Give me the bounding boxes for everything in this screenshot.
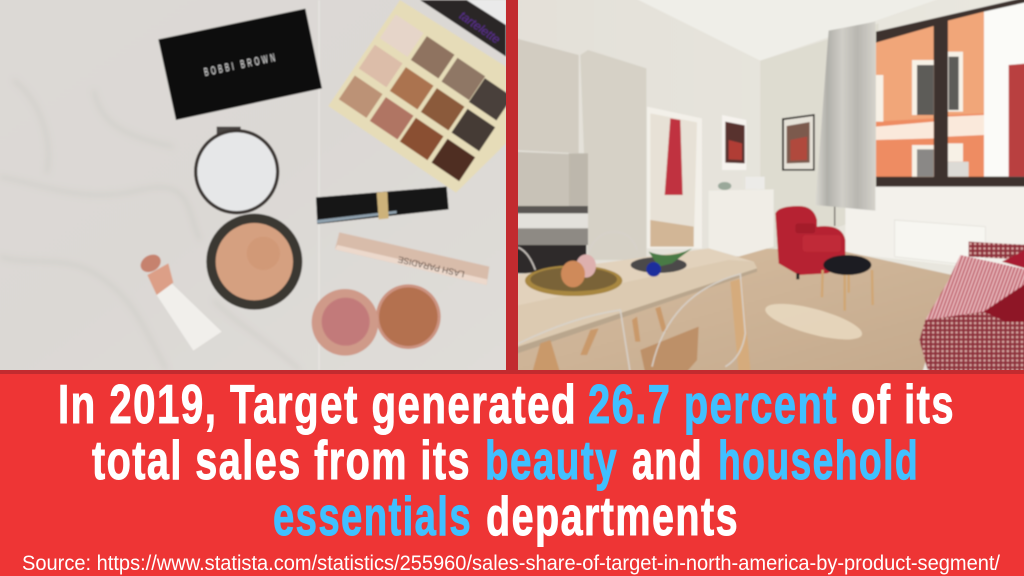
headline [58, 373, 955, 547]
marble surface [0, 0, 510, 373]
line 2: beauty [485, 429, 618, 491]
dark red photo frame [0, 0, 1024, 374]
radiator [895, 220, 985, 267]
walls and ceiling [512, 0, 1024, 373]
red armchair [775, 206, 845, 279]
line 2: household [718, 429, 919, 491]
floor [512, 248, 952, 373]
wall art left [722, 115, 746, 170]
line 3: essentials [273, 485, 472, 547]
black Bobbi Brown palette [158, 9, 322, 120]
line 3: departments [486, 485, 739, 547]
round black side table [822, 255, 873, 311]
kitchen units [512, 37, 646, 273]
brand name: BOBBI BROWN [203, 51, 279, 78]
sunlight patch [765, 304, 862, 340]
line 1: 26.7 percent [588, 373, 838, 435]
dark plate with blue flower [631, 248, 692, 277]
line 2 [92, 429, 919, 491]
photo: cosmetics flat lay [0, 0, 512, 373]
line 2: total sales from its [92, 429, 471, 491]
wall art right [782, 114, 815, 171]
bronzer compact [206, 214, 302, 310]
line 1: of its [851, 373, 955, 435]
line 2: and [632, 429, 703, 491]
transparent chairs [518, 246, 747, 370]
red patterned sofa [919, 242, 1024, 373]
window [876, 0, 1024, 187]
eyeshadow palette: tartelette [457, 8, 503, 47]
line 3 [273, 485, 739, 547]
mascara tube [335, 232, 489, 285]
doorway [647, 107, 702, 248]
dining table [512, 248, 757, 373]
blush compact [312, 284, 441, 356]
gold tray with vases [525, 254, 622, 296]
cream tube [137, 251, 222, 351]
line 1: In 2019, Target generated [58, 373, 577, 435]
white sideboard [709, 177, 774, 257]
photo: apartment interior [512, 0, 1024, 373]
source line: Source: https://www.statista.com/statistics/255960/sales-share-of-target-in-north-america-by-product-segment/ [22, 552, 1000, 575]
eyeshadow palette [328, 0, 512, 193]
compact mirror lid [194, 127, 279, 214]
curtain [815, 22, 875, 211]
mascara tube: LASH PARADISE [397, 254, 465, 279]
floor lamp [833, 206, 836, 227]
lipstick [316, 187, 449, 224]
